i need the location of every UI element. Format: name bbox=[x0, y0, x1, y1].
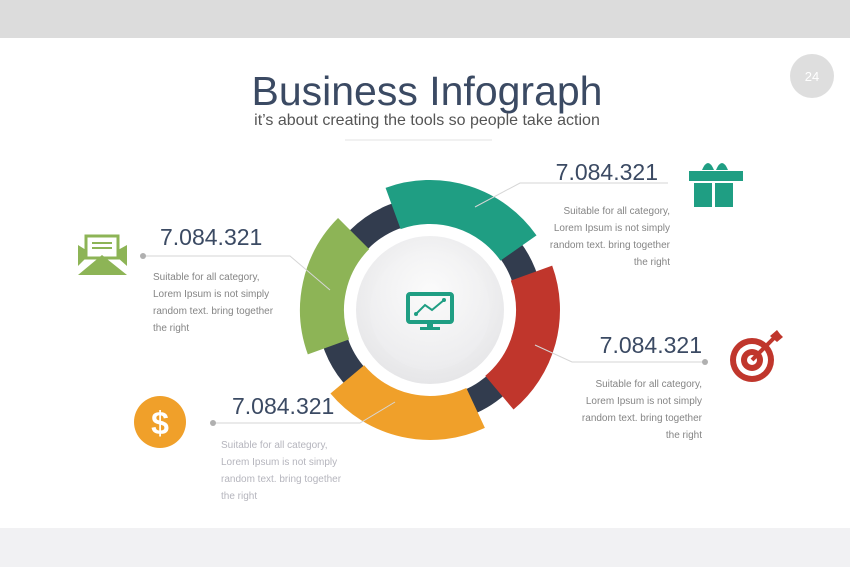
block: left bbox=[153, 224, 274, 334]
block: top right: random text. bring together bbox=[550, 240, 671, 251]
block: right bbox=[582, 332, 703, 441]
page number badge bbox=[790, 54, 834, 98]
block: left: the right bbox=[153, 323, 189, 334]
segment: green bbox=[322, 234, 354, 347]
icon: dollar bbox=[134, 396, 186, 448]
block: left: Lorem Ipsum is not simply bbox=[153, 289, 269, 300]
block: left: random text. bring together bbox=[153, 306, 274, 317]
block: top right: Lorem Ipsum is not simply bbox=[554, 223, 670, 234]
block: right: random text. bring together bbox=[582, 413, 703, 424]
block: bottom left: random text. bring together bbox=[221, 474, 342, 485]
segment: teal bbox=[393, 202, 518, 248]
title: Business Infograph bbox=[251, 68, 603, 114]
icon: target bbox=[730, 330, 783, 382]
icon: monitor chart bbox=[408, 294, 452, 330]
icon: dollar: $ bbox=[151, 405, 169, 441]
block: top right: the right bbox=[634, 257, 670, 268]
block: bottom left bbox=[221, 393, 342, 502]
block: bottom left: the right bbox=[221, 491, 257, 502]
block: right: Lorem Ipsum is not simply bbox=[586, 396, 702, 407]
subtitle: it’s about creating the tools so people take action bbox=[254, 112, 600, 129]
block: left: Suitable for all category, bbox=[153, 272, 260, 283]
icon: envelope bbox=[78, 236, 127, 275]
block: top right bbox=[550, 159, 671, 268]
circular diagram bbox=[322, 202, 538, 418]
block: left: 7.084.321 bbox=[160, 224, 262, 250]
block: bottom left: 7.084.321 bbox=[232, 393, 334, 419]
block: top right: 7.084.321 bbox=[556, 159, 658, 185]
page number badge: 24 bbox=[805, 69, 819, 84]
block: right: 7.084.321 bbox=[600, 332, 702, 358]
block: top right: Suitable for all category, bbox=[563, 206, 670, 217]
segment: orange bbox=[347, 379, 476, 418]
icon: gift bbox=[689, 163, 743, 207]
block: bottom left: Lorem Ipsum is not simply bbox=[221, 457, 337, 468]
connector lines bbox=[143, 183, 705, 423]
block: right: Suitable for all category, bbox=[595, 379, 702, 390]
segment: red bbox=[499, 273, 538, 393]
block: right: the right bbox=[666, 430, 702, 441]
block: bottom left: Suitable for all category, bbox=[221, 440, 328, 451]
